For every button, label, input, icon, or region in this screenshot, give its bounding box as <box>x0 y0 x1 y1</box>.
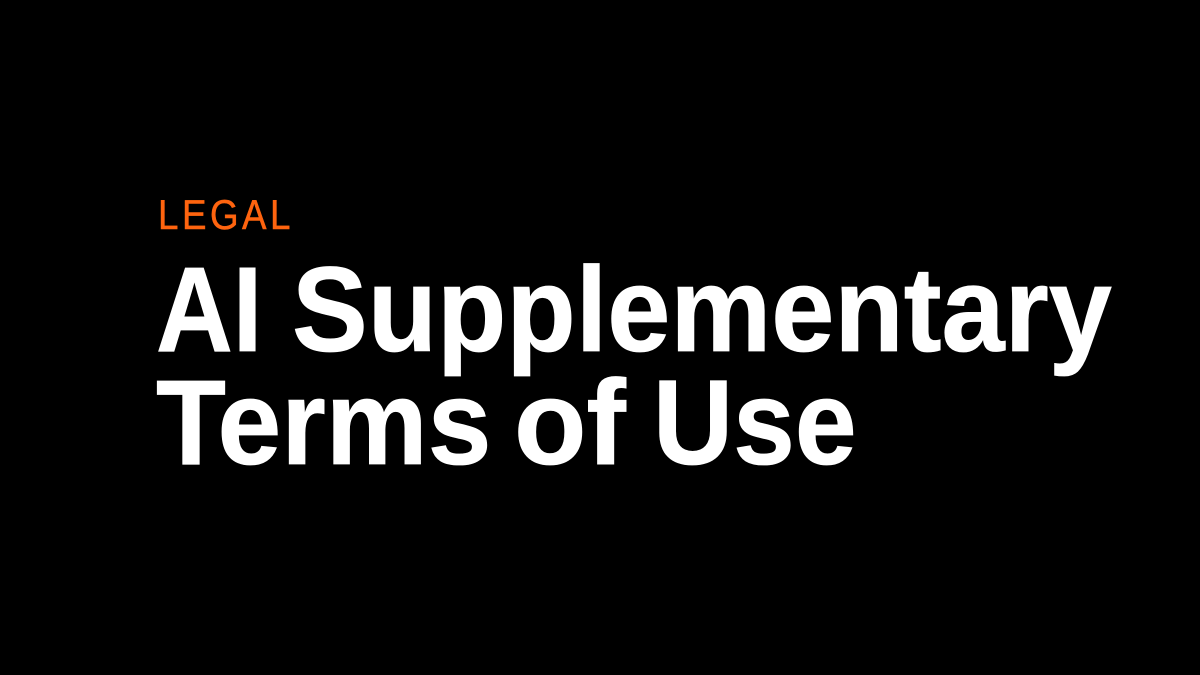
title: Use <box>652 354 856 490</box>
title: Supplementary <box>292 241 1112 377</box>
title: of <box>514 354 625 490</box>
eyebrow label: LEGAL <box>158 191 294 238</box>
title <box>156 241 1112 490</box>
title: Terms <box>156 354 491 490</box>
title: AI <box>156 241 262 377</box>
